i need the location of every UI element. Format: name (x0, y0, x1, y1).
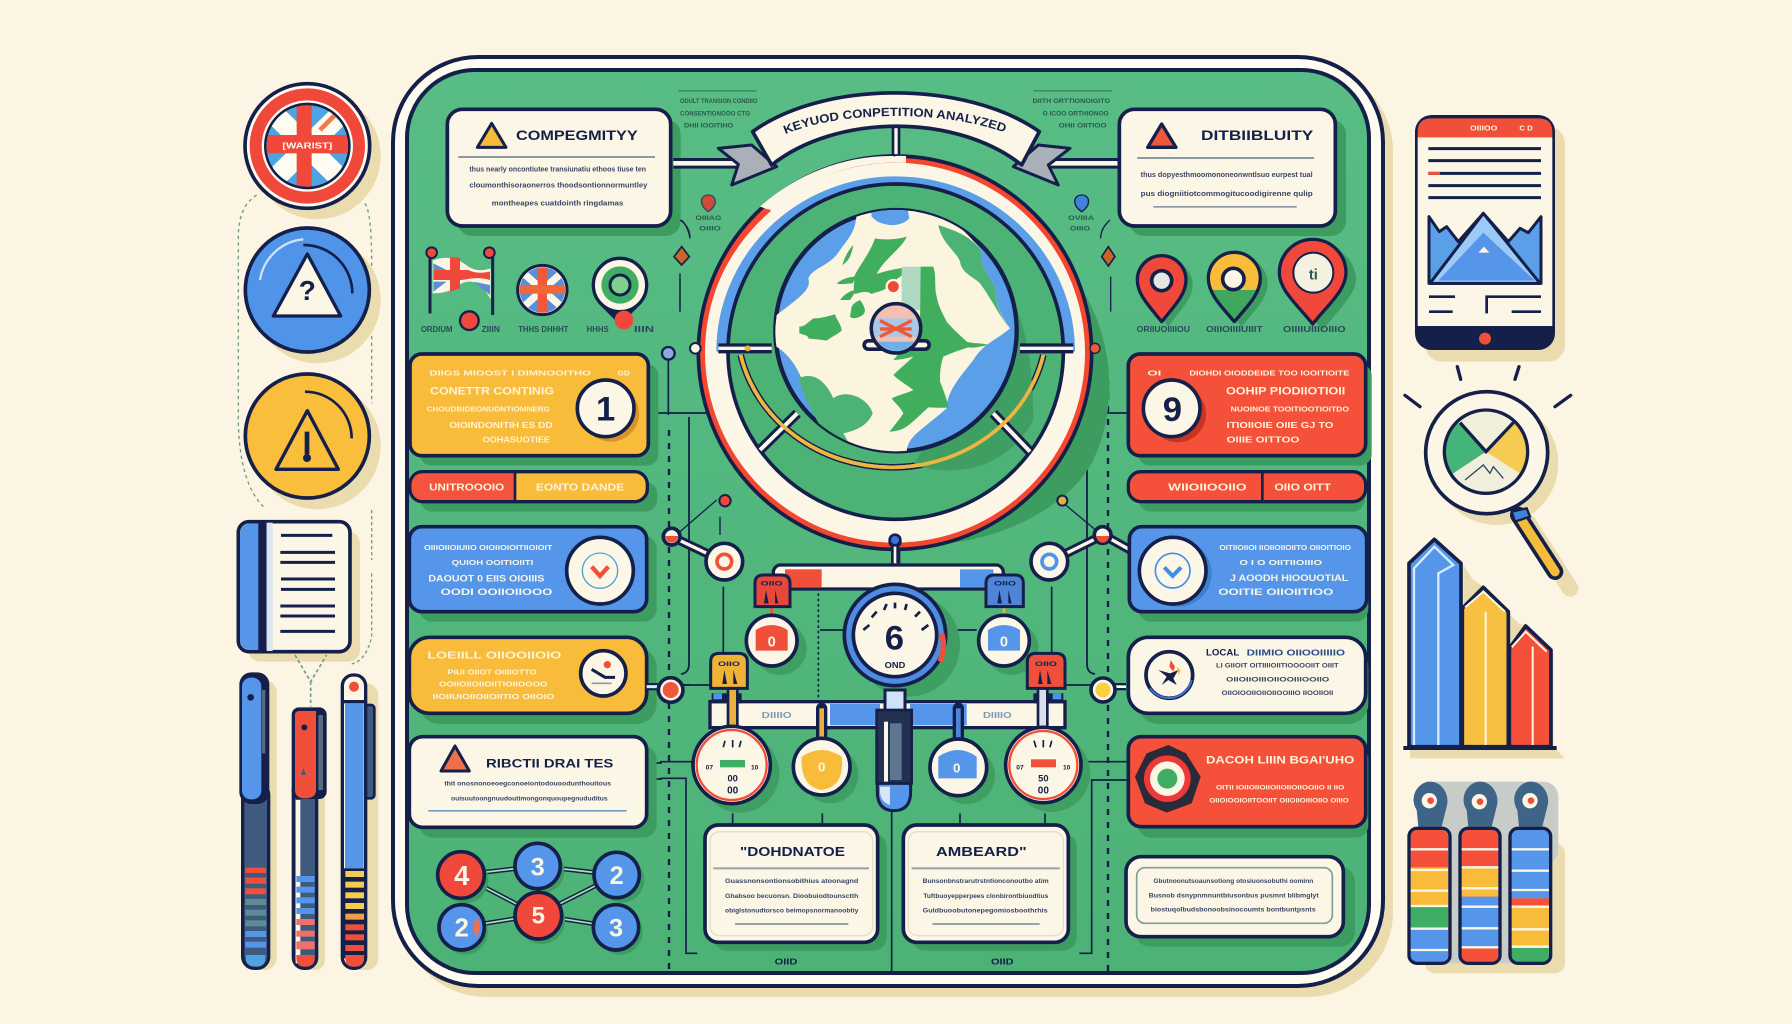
pill: right status: OIIO OITT (1274, 483, 1331, 494)
top-right note text: DIITH ORTTIONOIGITO (1033, 98, 1110, 105)
body text: thus dopyesthmoomononeonwntlsuo eurpest tual (1141, 172, 1313, 179)
icon: waving UK flag: ZIIIN (481, 325, 500, 334)
dial: red: 0 (768, 635, 776, 651)
body text: NUOINOE TOOITIOOTIOITDO (1231, 404, 1349, 413)
link bars to ribbon (673, 127, 1120, 570)
right small pin label: OIIIO (1070, 226, 1090, 233)
column three (1511, 830, 1549, 963)
dial: yellow: 0 (818, 760, 825, 775)
body text: pus diogniitiotcommogitucoodigirenne qulip (1141, 191, 1313, 198)
body text: OOHASUOTIEE (483, 435, 551, 444)
right small pin label: OVIIIA (1068, 215, 1094, 222)
icon: check badge red (567, 537, 633, 604)
clip hole markers (1414, 782, 1548, 827)
panel: distribility (1119, 109, 1346, 236)
body text: CONETTR CONTINIG (430, 386, 554, 398)
icon: red pin: ORIIUOIIIIOU (1137, 325, 1190, 334)
node 4 (438, 852, 488, 903)
left side column and top-left section (238, 84, 690, 512)
body text: OITII IOIIOIIOIIOIIOIIOIIOOIIO II IIO (1216, 784, 1344, 791)
body text: obiglstonudtorsco beimopsnormanoobtiy (725, 908, 859, 915)
body text: montheapes cuatdointh ringdamas (492, 201, 623, 208)
heading: right drafts: RIBCTII DRAI TES (486, 756, 613, 770)
right small marker (680, 220, 1115, 312)
icon: yellow green pin: OIIIOIIIIUIIIT (1206, 325, 1263, 334)
stacked tag columns (1409, 782, 1565, 973)
right bottom section (1113, 527, 1565, 973)
connector lines (648, 380, 1128, 975)
body text: OIIIE OITTOO (1227, 435, 1299, 444)
node 2 right: 2 (610, 862, 624, 890)
panel: cream rejection card (409, 737, 657, 838)
icon: waving UK flag: ORDIUM (421, 325, 453, 334)
dial: yellow (793, 708, 858, 803)
body text: IIOIIUIOIIOIIOIITIO OIIOIO (433, 694, 555, 701)
body text: OIIOIOOIIOIIOIIOOIIIO IIOOIIOII (1222, 690, 1333, 697)
body text: Busnob dsnypnmnuntbiusonbus pusmnt blibmglyt (1149, 892, 1319, 899)
dial: red (746, 615, 807, 675)
ribbon banner (716, 91, 1072, 186)
number badge 1: 1 (596, 391, 615, 429)
icon: UK flag badge (245, 84, 381, 219)
icon: warning triangle (441, 746, 469, 771)
horizontal gauge bar: DIIIIO (983, 711, 1012, 720)
Scotland (853, 237, 910, 294)
node: red ring (663, 528, 743, 580)
node: blue ring (1031, 527, 1111, 580)
title: ribbon heading (783, 116, 1007, 135)
gauge: red (1006, 727, 1090, 812)
left small pin label: OIIIO (699, 226, 721, 233)
panel: competitivity (447, 109, 681, 236)
number badge 9: 9 (1163, 391, 1182, 429)
magnifier gauge with 6: OND (885, 660, 905, 670)
gauge: green (693, 726, 779, 813)
Ireland (799, 314, 842, 341)
icon: large red pin (1279, 239, 1356, 334)
body text: cloumonthisoraonerros thoodsontionnormuntley (469, 182, 647, 189)
top-left note text: DHII IOOITIHO (684, 122, 733, 129)
body text (444, 781, 611, 803)
icon: bird badge (1146, 652, 1193, 698)
icon: blue question warning (245, 228, 381, 363)
main panel frame (393, 57, 1393, 997)
ribbon banner: KEYUOD CONPETITION ANALYZED (783, 108, 1006, 134)
body text: Guassnonsontionsobithius atoonagnd (725, 878, 858, 885)
body text: OIIIOIIOIUIIO OIOIIOIOITIIOIOIT (424, 545, 553, 552)
icon: yellow alert warning (245, 374, 381, 509)
icon: blue pen (239, 672, 277, 970)
tag: yellow: OIIO (718, 661, 740, 668)
icon: large red pin: OIIIIUIIIOIIIO (1283, 325, 1346, 334)
body text: OITIIOIIOI IIOIIOIIOIITO OIIOITIOIO (1219, 545, 1352, 552)
body text: DIOHDI OIODDEIDE TOO IOOITIOITE (1189, 369, 1349, 378)
body text: OOITIE OIIOIITIOO (1218, 587, 1333, 597)
body text: CHOUDBIDEONUONTIOMNERG (427, 404, 550, 413)
icon: green ring pin (587, 258, 654, 334)
gauge: red: 50 (1038, 774, 1049, 784)
right top section (1119, 109, 1571, 588)
icon: small marker left (674, 220, 690, 312)
pill: right status: WIIOIIOOIIO (1168, 483, 1247, 494)
node 3 bottom: 3 (609, 915, 623, 943)
column two (1461, 830, 1499, 963)
top-left note text (678, 90, 757, 129)
magnifier gauge with 6 (844, 584, 960, 811)
panel: yellow card left (409, 637, 683, 724)
body text: biostuqolbudsbonoobsinocoumts bontbuntpsnts (1151, 907, 1316, 914)
top progress bar (773, 535, 1003, 589)
icon: green ring pin: IIIN (634, 325, 654, 334)
icon: target badge (1135, 745, 1201, 813)
body text: J AOODH HIOOUOTIAL (1230, 573, 1349, 583)
body text: OOHIP PIODIIOTIOII (1226, 386, 1345, 398)
icon: red pen (292, 707, 327, 970)
gauge: red: 00 (1038, 785, 1049, 796)
node 3 top (515, 843, 564, 893)
panel: yellow competition card (410, 354, 658, 466)
icon: red pin (1137, 256, 1193, 334)
icon: phone report (1415, 115, 1565, 362)
panel: local card: DIIMIO OIIOOIIIIIO (1247, 647, 1346, 657)
left small pin label: OIIIAG (695, 215, 721, 222)
column one (1410, 830, 1448, 963)
body text: thus nearly oncontiutee transiunatiu ethoos tiuse ten (469, 167, 646, 174)
England (889, 267, 988, 432)
tag: red (755, 575, 790, 617)
icon: UK flag badge: [WARIST] (282, 142, 333, 151)
icon: waving UK flag (421, 247, 500, 334)
nodes near bottom of ring (680, 495, 1102, 547)
panel: red card lower (1128, 737, 1368, 838)
top-left note text: ODULT TRANSION CONDIIO (680, 98, 757, 105)
heading: local: LOCAL (1206, 647, 1240, 657)
icon: blue question warning: ? (299, 275, 316, 306)
gauge: green: 07 (706, 764, 713, 771)
network chart of numbered nodes (438, 843, 644, 955)
centre bottom section (660, 527, 1133, 972)
body text: Gbutnoonutsoaunsotiong otosiuonsobuthi oominn (1153, 878, 1313, 885)
pill: left status (410, 472, 657, 512)
lighter strip (902, 267, 921, 310)
tag: red right: OIIO (1035, 661, 1057, 668)
body text: ITIOIIOIE OIIE GJ TO (1227, 421, 1333, 430)
body text (1141, 172, 1313, 198)
panel: dominance (705, 825, 887, 951)
tag: red: OIIO (761, 580, 783, 587)
heading: red card: DACOH LIIIN BGAI'UHO (1206, 754, 1355, 766)
body text (1149, 878, 1319, 914)
panel: red competition card (1128, 354, 1372, 466)
footer label left: OIID (775, 957, 797, 967)
gauge: green: 00 (727, 785, 739, 796)
heading: dominate: "DOHDNATOE (740, 845, 845, 859)
gauge: green: 00 (727, 774, 738, 784)
panel: blue card left (409, 527, 657, 622)
node 2 right (594, 852, 644, 903)
node 4: 4 (454, 860, 470, 891)
dial: blue: 0 (1000, 635, 1008, 651)
body text (1216, 662, 1339, 697)
icon: cream top pen (342, 675, 378, 970)
body text: Tuftbuoyepperpees clonbirontbiuodtius (923, 893, 1049, 900)
body text: OODI OOIIOIIOOO (441, 587, 552, 597)
bar chart (1403, 539, 1565, 758)
body text (1209, 784, 1349, 805)
panel: bottom right note (1126, 857, 1355, 947)
icon: red warning triangle (1148, 124, 1176, 147)
node links (672, 535, 1133, 562)
gauge: red: 10 (1063, 764, 1071, 771)
body text (725, 878, 859, 915)
tag: red right (1027, 653, 1065, 727)
left bottom section (238, 510, 683, 970)
icon: document book (238, 522, 360, 662)
dashed links under document (295, 655, 327, 707)
number badge 9 (1143, 380, 1206, 442)
magnifier gauge with 6: 6 (885, 619, 904, 657)
icon: warning triangle (477, 123, 506, 147)
node 3 bottom (593, 905, 643, 955)
heading: distribility: DITBIIBLUITY (1201, 127, 1314, 143)
connector lines (660, 587, 1127, 972)
tag: yellow (711, 653, 747, 727)
top-right note text: OHII OIITIOO (1059, 122, 1107, 129)
body text: GD (618, 369, 630, 378)
node 5: 5 (532, 903, 545, 930)
icon: chart badge (581, 651, 626, 696)
icon: check badge blue (1139, 537, 1212, 607)
left small pin label (695, 195, 721, 233)
ring chart around globe (698, 156, 1109, 549)
tag: blue (986, 575, 1023, 617)
right small pin label (1068, 195, 1094, 233)
body text: ouisuutoongnuudoutimongonquoupegnududitus (451, 796, 608, 803)
column outlines (1409, 828, 1551, 963)
top-right note text (1033, 90, 1112, 129)
pill: left status: EONTO DANDE (536, 483, 625, 494)
dial: blue (979, 615, 1038, 675)
dial: blue lower (930, 708, 995, 804)
node 3 top: 3 (531, 853, 545, 881)
connector node (647, 678, 683, 702)
number badge 1 (577, 380, 639, 442)
footer label right: OIID (991, 957, 1014, 967)
body text (427, 369, 630, 444)
node 2 left (439, 905, 488, 955)
body text: DIIGS MIOOST I DIMNOOITHO (429, 369, 591, 378)
body text (923, 878, 1049, 915)
pill: right status (1128, 472, 1366, 512)
icon: round UK flag: THHS DHHHT (518, 325, 568, 334)
body text: OOIIOIIOIIOIITIOIIOOOO (439, 682, 548, 689)
body text (424, 545, 553, 597)
panel: local card (1113, 637, 1368, 724)
connector node: yellow right (1091, 678, 1115, 702)
gauge: green: 10 (751, 764, 759, 771)
icon: magnifier with pie chart (1405, 367, 1571, 588)
node 5 (515, 892, 565, 944)
top-left note text: CONSENTIONOOO CTO (680, 111, 750, 118)
icon: green ring pin: HHHS (587, 325, 609, 334)
horizontal gauge bar: DIIIIO (762, 711, 792, 720)
heading: ambeard: AMBEARD" (936, 845, 1027, 859)
pill: left status: UNITROOOIO (429, 483, 504, 494)
body text: OIIOIOOIOIITOOIIT OIIOIIOIIIOIIO OIIIO (1209, 798, 1349, 805)
panel: ambeard (903, 825, 1077, 951)
body text (427, 651, 562, 701)
body text: PIUI OIIOT OIIIIOTTO (447, 670, 537, 677)
body text: thit onosnonoeoegconoeiontodouoodunthouitous (444, 781, 611, 788)
body text: O I O OIITIIOIIIO (1239, 560, 1323, 567)
central pin with flag (868, 280, 925, 353)
icon: round UK flag (518, 265, 568, 334)
body text: LI GIIOIT OITIIIIOIITIOOOOIIT OIIIT (1216, 662, 1339, 669)
body text: DAOUOT 0 EIIS OIOIIIS (428, 573, 544, 583)
central globe section (673, 90, 1118, 564)
icon: large red pin: ti (1309, 267, 1318, 283)
body text: OIIOIIOIIIOIIOOIIIOOIIO (1226, 677, 1329, 684)
body text: OI (1147, 369, 1161, 378)
gauge: red: 07 (1016, 764, 1024, 771)
node 2 left: 2 (454, 913, 469, 943)
body text (1218, 545, 1352, 597)
icon: phone report: OIIIOO (1470, 124, 1498, 133)
dial: blue lower: 0 (953, 760, 960, 775)
tag: blue: OIIO (994, 580, 1016, 587)
body text (469, 167, 647, 208)
spokes (690, 343, 1100, 467)
body text: Bunsonbnstrarutrstntionconoutbo atim (923, 878, 1049, 885)
body text: LOEIILL OIIOOIIOIO (427, 651, 562, 662)
icon: yellow green pin (1206, 250, 1268, 334)
panel: blue card right (1129, 527, 1368, 622)
body text: OIOINDONITIH ES DD (449, 421, 553, 430)
heading: competivity: COMPEGMITYY (516, 127, 638, 143)
body text: QUIOH OOITIOIITI (452, 560, 533, 567)
dashed outline around alert icons (238, 195, 372, 507)
body text: Ghabsoo becuonsn. Dioobuiodtounsctth (725, 893, 858, 900)
connector yellow (1113, 676, 1126, 698)
node: blue marker (662, 347, 675, 415)
horizontal gauge bar (710, 693, 1065, 728)
body text (1147, 369, 1349, 444)
body text: Guldbuoobutonepegomiosboothrhis (923, 908, 1048, 915)
globe map of Britain (773, 205, 1017, 453)
icon: phone report: C D (1519, 124, 1533, 133)
top-right note text: O ICOO ORTHIONOO (1043, 111, 1109, 118)
